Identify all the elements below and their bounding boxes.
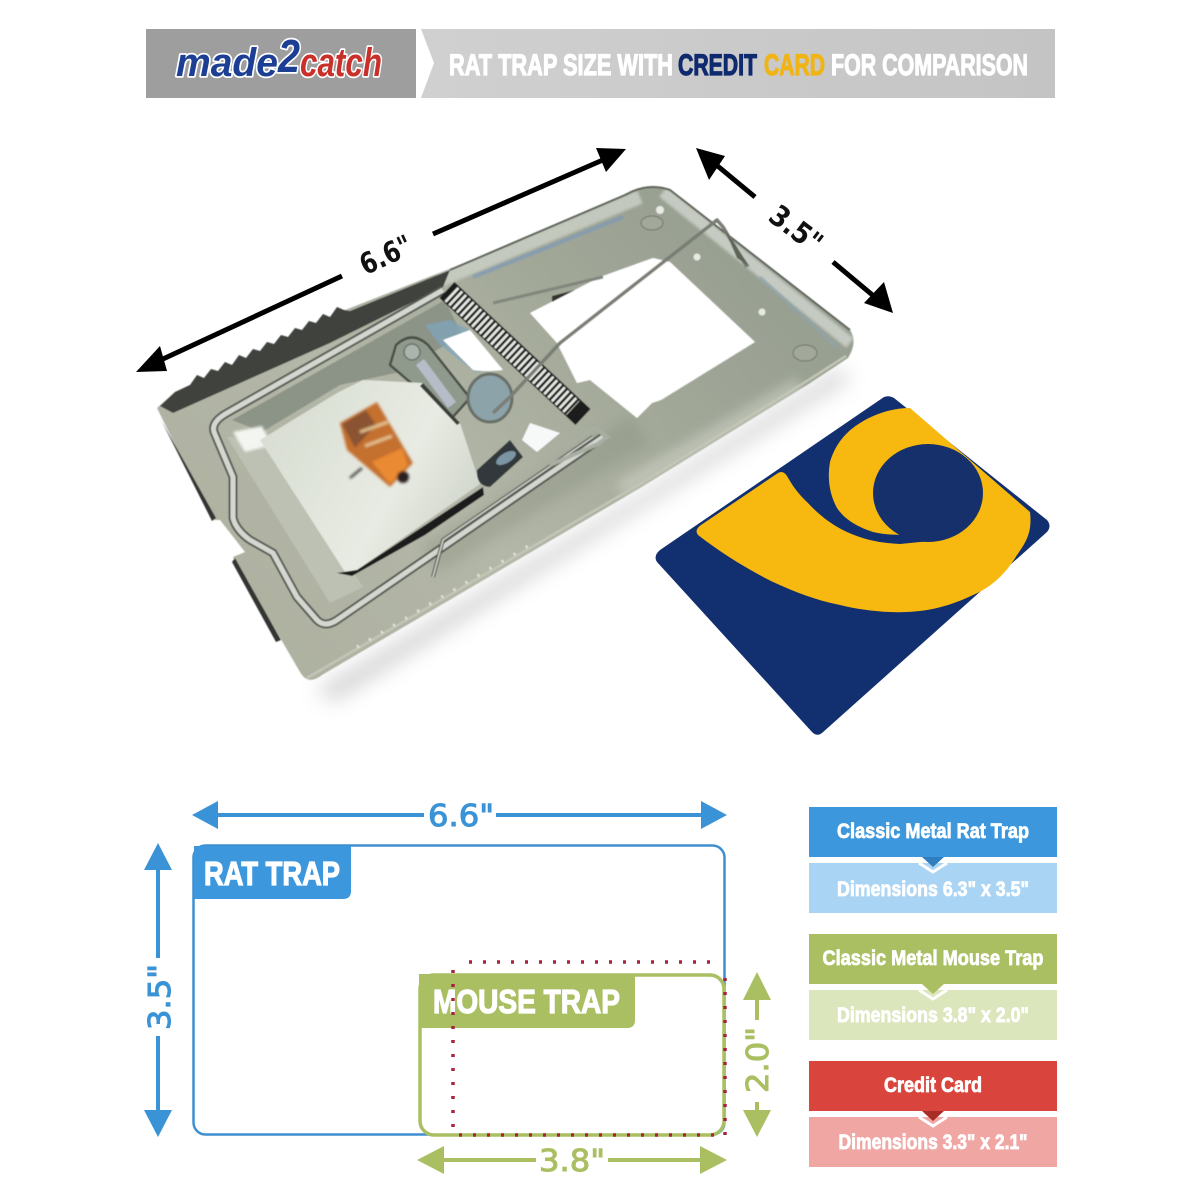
mouse trap outline bbox=[420, 975, 724, 1135]
width dimension bbox=[696, 148, 893, 313]
secondary wires bbox=[433, 437, 593, 577]
logo: made2catch: 2 bbox=[277, 30, 300, 82]
dimension 3.5 bbox=[143, 843, 178, 1137]
centre cutouts and hardware bbox=[425, 320, 503, 372]
trap base plate bbox=[157, 187, 854, 680]
kill bar wire bbox=[214, 290, 603, 624]
card yellow swoosh bbox=[697, 408, 1030, 612]
length dimension: 6.6" bbox=[354, 228, 417, 282]
title panel bbox=[421, 29, 1055, 98]
dimension 2.0: 2.0" bbox=[741, 1027, 776, 1093]
banner title text: CREDIT bbox=[678, 49, 757, 82]
legend: rat trap: Dimensions 6.3" x 3.5" bbox=[837, 878, 1029, 901]
dimension 3.5: 3.5" bbox=[143, 964, 178, 1030]
serrated dark top edge bbox=[160, 270, 450, 413]
length dimension bbox=[136, 148, 626, 372]
credit card illustration bbox=[656, 396, 1050, 735]
mouse trap tab: MOUSE TRAP bbox=[433, 983, 620, 1020]
legend: credit card: Dimensions 3.3" x 2.1" bbox=[838, 1131, 1028, 1154]
banner title text: CARD bbox=[764, 49, 825, 82]
lower rim highlight bbox=[307, 356, 846, 678]
dimension 3.8: 3.8" bbox=[539, 1144, 605, 1179]
legend: mouse trap bbox=[809, 934, 1057, 1040]
rat trap tab: RAT TRAP bbox=[204, 855, 340, 892]
logo: made2catch: made bbox=[176, 41, 278, 85]
rivets bbox=[641, 216, 817, 361]
dimension 6.6 bbox=[192, 799, 727, 834]
mouse trap tab bbox=[419, 974, 635, 1028]
dimension 6.6: 6.6" bbox=[428, 799, 494, 834]
credit card dotted outline bbox=[453, 962, 725, 1135]
brand panel bbox=[146, 29, 416, 98]
logo: made2catch: catch bbox=[300, 41, 382, 85]
rat trap tab bbox=[194, 846, 351, 899]
interior under kill bar bbox=[232, 300, 462, 432]
legend: rat trap bbox=[809, 807, 1057, 913]
legend: rat trap: Classic Metal Rat Trap bbox=[837, 820, 1029, 843]
legend: mouse trap: Dimensions 3.8" x 2.0" bbox=[837, 1004, 1029, 1027]
serrated left edge bbox=[157, 412, 281, 642]
spring coil bbox=[447, 290, 583, 417]
rat trap photo illustration bbox=[136, 148, 893, 702]
banner title text bbox=[449, 49, 1028, 82]
shading patches bbox=[430, 430, 640, 560]
width dimension: 3.5" bbox=[763, 198, 829, 260]
holding arm wire bbox=[493, 220, 747, 413]
small dimples bbox=[656, 206, 766, 316]
logo: made2catch bbox=[176, 30, 382, 85]
bait bbox=[340, 402, 413, 487]
rim outline bbox=[450, 187, 850, 330]
rectangular window in base bbox=[530, 258, 755, 418]
banner title text: RAT TRAP SIZE WITH bbox=[449, 49, 673, 82]
bait plate bbox=[260, 380, 480, 572]
rat trap outline bbox=[194, 846, 724, 1134]
header banner bbox=[146, 29, 1055, 98]
card centre circle bbox=[873, 444, 983, 542]
black catch lever bbox=[477, 440, 523, 487]
legend: credit card bbox=[809, 1061, 1057, 1167]
legend: credit card: Credit Card bbox=[884, 1074, 982, 1097]
size comparison diagram bbox=[143, 799, 776, 1179]
bait plate hinge strip bbox=[227, 437, 363, 603]
dimension 2.0 bbox=[741, 972, 776, 1137]
banner title text: FOR COMPARISON bbox=[831, 49, 1028, 82]
legend: mouse trap: Classic Metal Mouse Trap bbox=[822, 947, 1044, 970]
shadow below plate bbox=[337, 487, 484, 576]
dimension 3.8 bbox=[417, 1144, 727, 1179]
